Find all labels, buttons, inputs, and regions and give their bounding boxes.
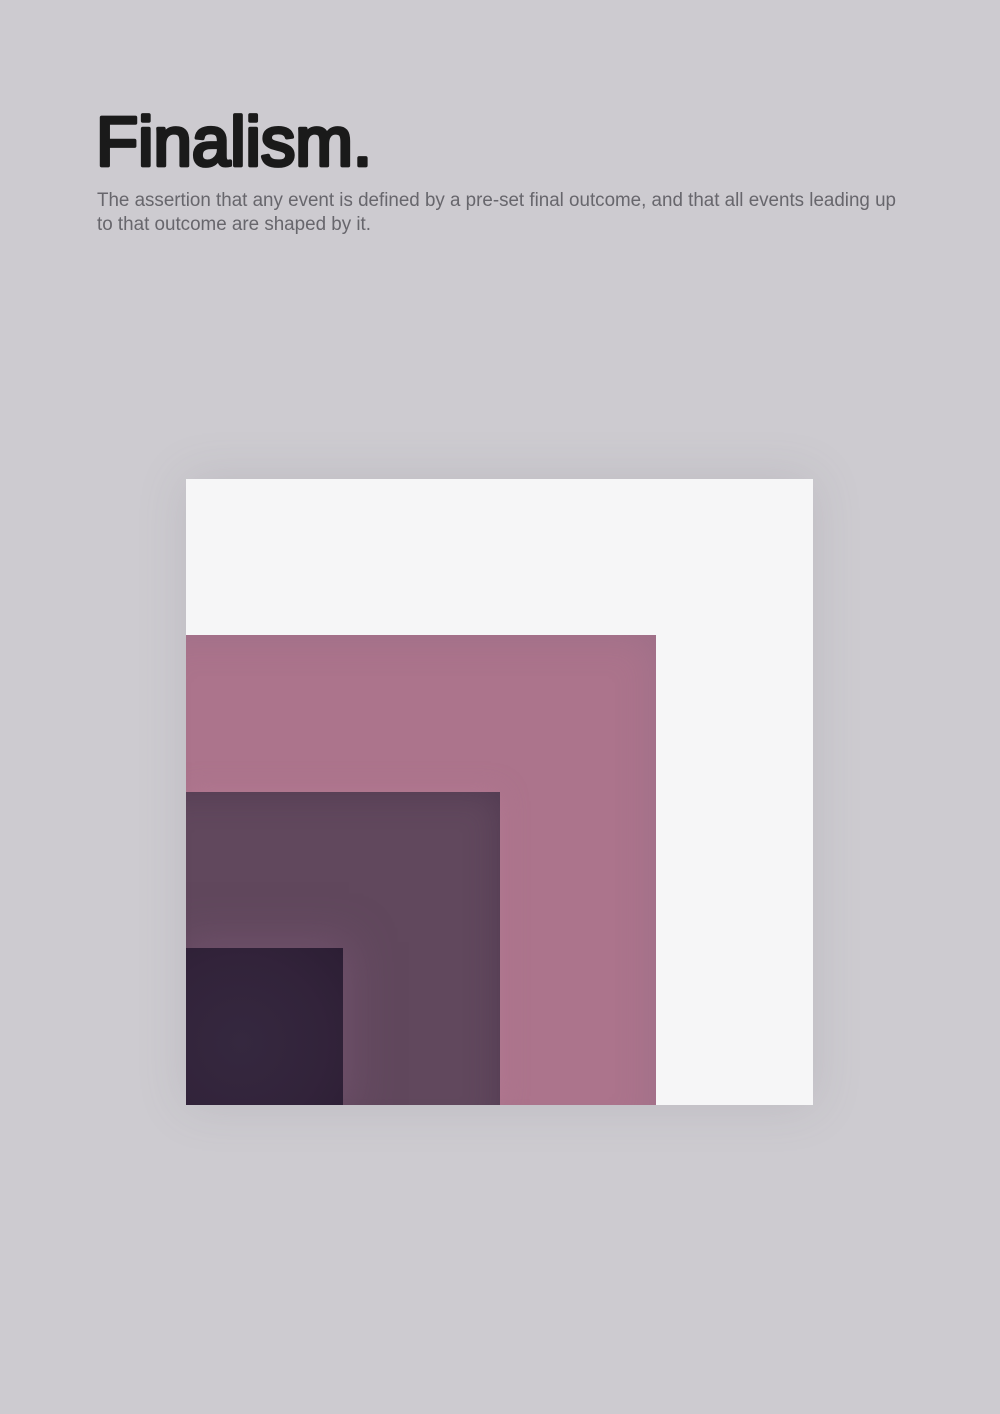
title: Finalism. (96, 102, 372, 180)
square: darkest (186, 948, 343, 1105)
nested squares diagram (186, 479, 813, 1105)
square: pink (186, 635, 656, 1105)
description text: to that outcome are shaped by it. (97, 214, 371, 235)
description text (97, 190, 896, 235)
square: plum (186, 792, 500, 1105)
description text: The assertion that any event is defined by a pre-set final outcome, and that all events leading up (97, 190, 896, 211)
